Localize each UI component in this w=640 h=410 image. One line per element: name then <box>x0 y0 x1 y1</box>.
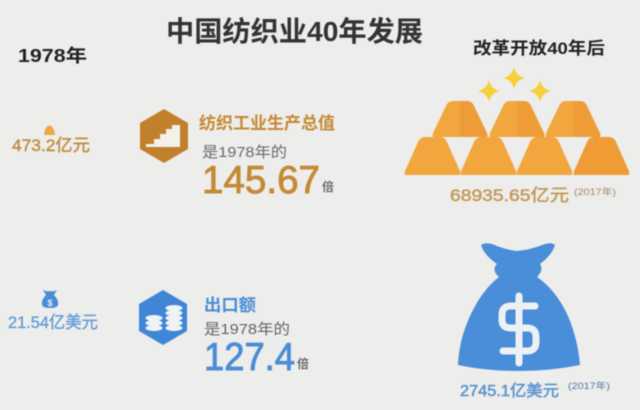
label: export value: 出口额 <box>204 296 256 315</box>
panel: textile output 1978 <box>12 126 90 155</box>
note: 2017: (2017年) <box>568 380 610 391</box>
text: compared to 1978: 是1978年的 <box>202 144 287 161</box>
panel: textile output multiple <box>140 109 335 202</box>
icon: sparkle stars <box>478 67 551 102</box>
panel: exports multiple <box>139 290 309 379</box>
note: 2017: (2017年) <box>574 186 616 197</box>
unit: times: 倍 <box>322 179 334 194</box>
panel: gold bars 2017 <box>405 67 629 205</box>
icon: top row of gold bars <box>433 101 600 137</box>
value: 2745.1: 2745.1亿美元 <box>460 382 559 400</box>
title: 中国纺织业40年发展 <box>166 16 423 47</box>
panel: exports 1978 <box>8 290 98 332</box>
value: 21.54: 21.54亿美元 <box>8 313 98 332</box>
value: 145.67: 145.67 <box>202 159 320 202</box>
panel: money bag 2017 <box>458 243 610 400</box>
icon: bottom row of gold bars <box>405 137 629 175</box>
value: 68935.65: 68935.65亿元 <box>450 186 569 205</box>
heading: after 40 years of reform: 改革开放40年后 <box>473 38 605 58</box>
value: 127.4: 127.4 <box>204 336 295 379</box>
text: compared to 1978: 是1978年的 <box>204 321 290 338</box>
unit: times: 倍 <box>297 356 309 371</box>
icon: small gold bar <box>44 126 55 135</box>
label: textile industrial output: 纺织工业生产总值 <box>199 113 335 133</box>
heading: 1978: 1978年 <box>18 45 87 66</box>
icon: blue hexagon coins <box>139 290 187 345</box>
icon: gold hexagon stairs <box>140 109 188 163</box>
icon: large money bag <box>458 243 580 371</box>
value: 473.2: 473.2亿元 <box>12 136 90 155</box>
icon: small money bag: $ <box>47 298 53 308</box>
